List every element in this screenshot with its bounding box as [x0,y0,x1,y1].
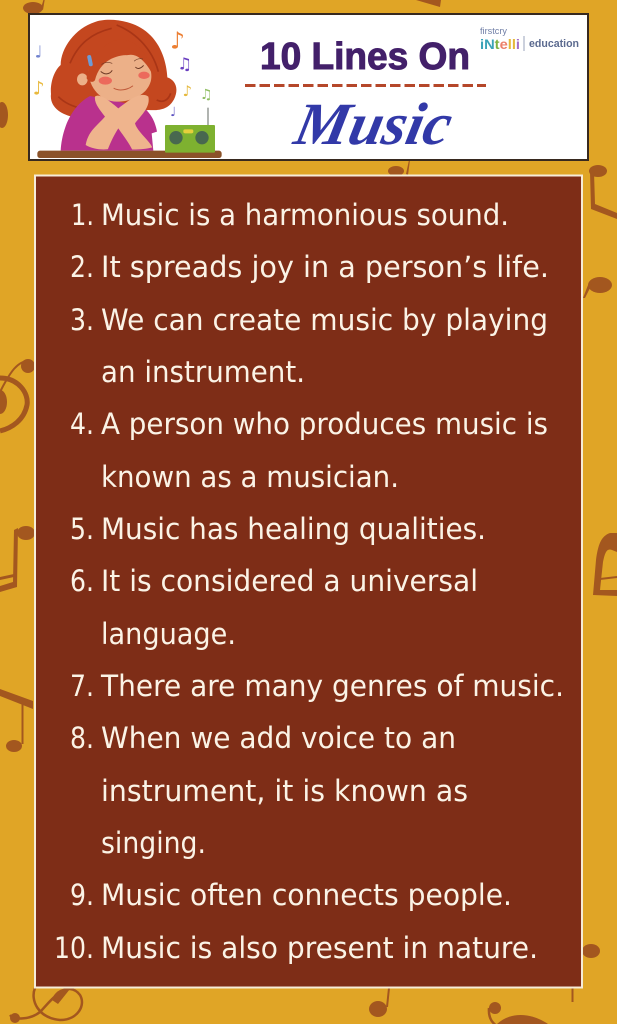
line 6: It is considered a universal [101,564,478,598]
icon: cheeks [99,72,150,85]
line 7: There are many genres of music. [100,669,564,703]
line 3: We can create music by playing [101,303,548,337]
icon: floating music notes: ♪ [183,83,192,100]
line 3 [70,303,548,389]
line 7: 7. [70,669,94,703]
line 9: Music often connects people. [101,878,512,912]
line 3: an instrument. [101,355,305,389]
line 8: When we add voice to an [101,721,456,755]
line 2: It spreads joy in a person’s life. [101,250,549,284]
icon: arms [86,95,152,150]
heading: 10 Lines On: 10 Lines On [260,36,470,78]
line 4: known as a musician. [101,460,399,494]
icon: ear [77,73,88,85]
line 3: 3. [70,303,94,337]
line 5: 5. [70,512,94,546]
line 6: language. [101,617,236,651]
panel: ten lines list [35,176,582,988]
logo: firstcry intelli education [480,26,579,52]
icon: floating music notes: ♩ [35,42,43,61]
line 10: Music is also present in nature. [101,931,538,965]
line 4: 4. [70,407,94,441]
line 8: 8. [70,721,94,755]
icon: radio [165,108,215,153]
icon: hair clip [87,55,93,67]
line 4: A person who produces music is [101,407,548,441]
icon: hair [51,20,176,117]
line 8 [70,721,468,860]
icon: eyes and smile [101,59,143,90]
icon: table [37,151,222,158]
icon: floating music notes: ♫ [177,54,192,73]
icon: floating music notes [33,26,213,119]
logo: firstcry intelli education: firstcry [480,26,508,36]
line 8: instrument, it is known as [101,774,468,808]
icon: hair strands [58,25,171,108]
icon: floating music notes: ♪ [33,78,45,99]
icon: floating music notes: ♫ [200,87,213,103]
icon: floating music notes: ♩ [170,104,176,119]
line 5: Music has healing qualities. [101,512,486,546]
line 1: 1. [71,198,94,232]
heading: Music: Music [288,92,458,158]
icon: dress neckline [107,128,133,151]
line 6 [70,564,478,651]
illustration: girl listening to music [33,20,222,158]
logo: firstcry intelli education: education [529,38,579,50]
line 10: 10. [54,931,94,965]
line 1: Music is a harmonious sound. [101,198,509,232]
line 8: singing. [101,826,206,860]
banner [29,14,588,160]
icon: dress [61,96,157,151]
line 6: 6. [70,564,94,598]
dashed divider [245,84,486,87]
line 9: 9. [70,878,94,912]
icon: floating music notes: ♪ [170,26,185,54]
icon: face [88,47,151,102]
logo: firstcry intelli education: iNtelli [480,36,520,52]
line 2: 2. [70,250,94,284]
icon: hair fringe [87,40,152,82]
line 4 [70,407,548,494]
